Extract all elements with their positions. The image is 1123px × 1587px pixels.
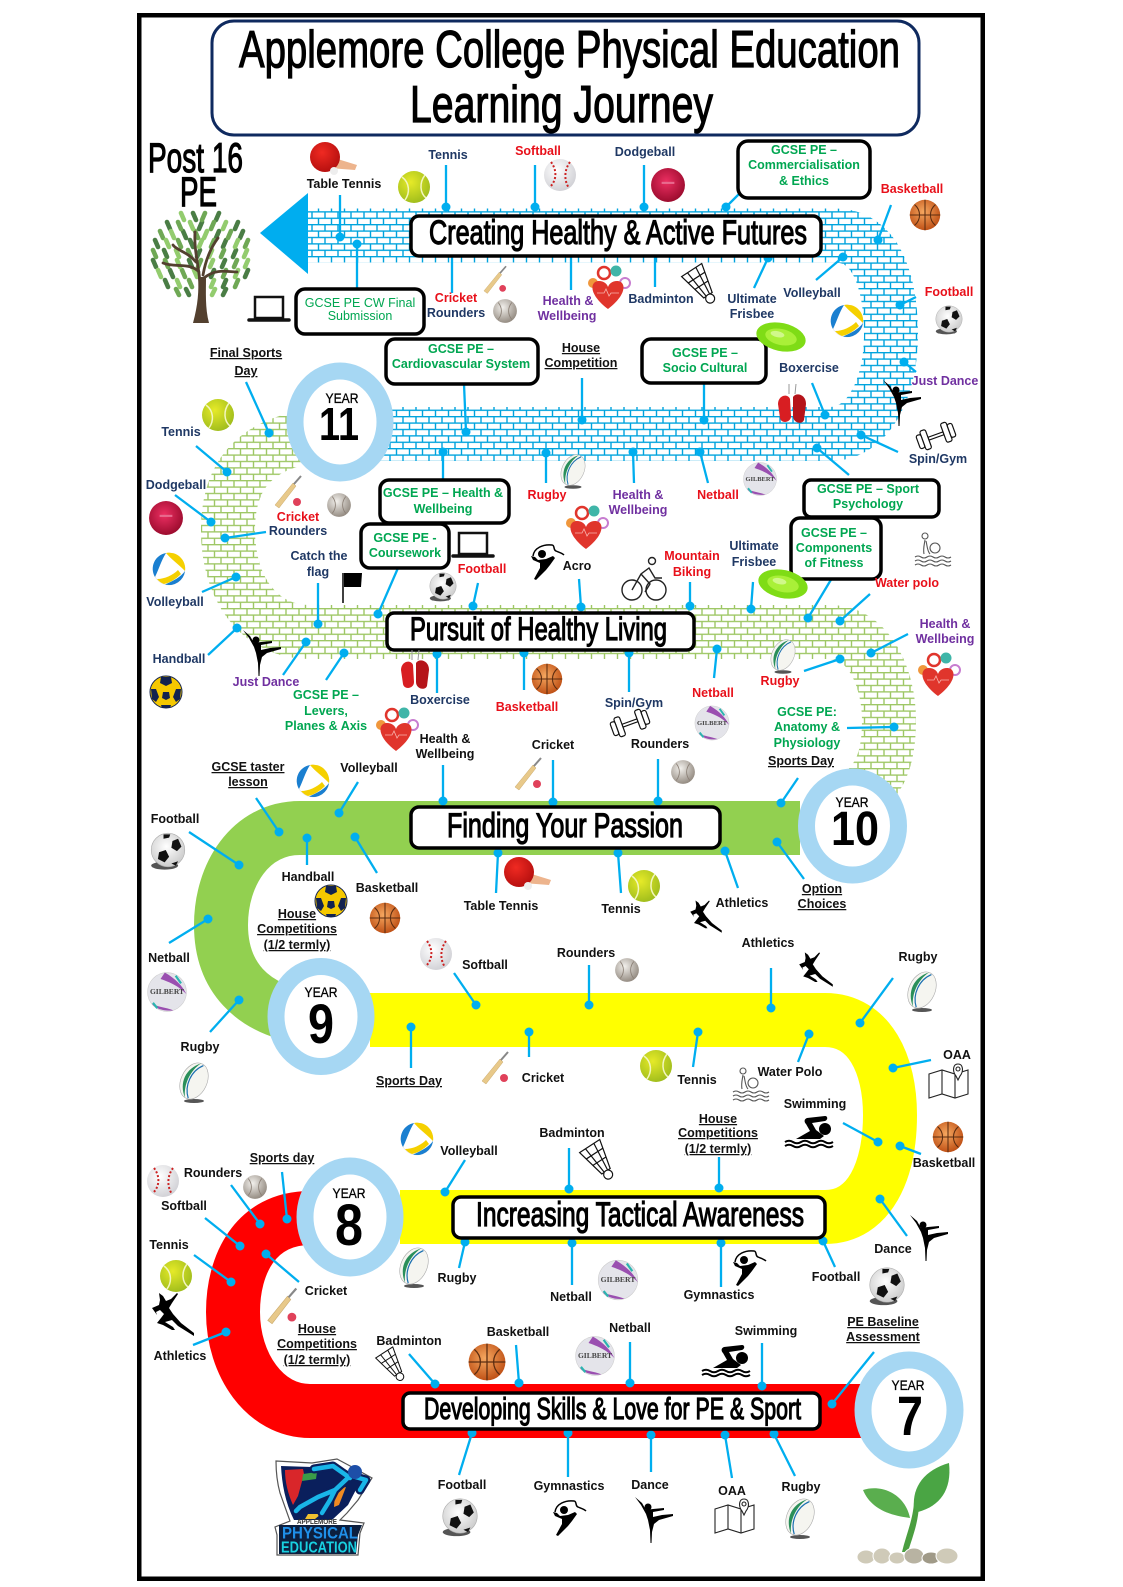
section: Developing Skills & Love for PE & Sport [147,1151,921,1543]
callout: Components of Fitness [791,518,881,579]
label: Ultimate Frisbee: Frisbee [732,555,776,569]
label: Health & Wellbeing: Health & [420,732,470,746]
label: Basketball: Basketball [913,1156,975,1170]
label: Option Choices: Option [802,882,842,896]
icon: rugby ball [174,1058,214,1104]
callout: Cardiovascular System: Cardiovascular System [392,357,530,371]
section: Finding Your Passion [148,732,846,1104]
label: Just Dance: Just Dance [233,675,299,689]
label: GCSE PE Levers, Planes & Axis: Planes & Axis [285,719,367,733]
label: Badminton: Badminton [539,1126,605,1140]
icon: rounders ball [493,299,517,323]
label: Netball: Netball [550,1290,592,1304]
badge: Year 10: 10 [831,803,879,856]
callout: Commercialisation & Ethics [738,141,870,198]
label: Rugby: Rugby [782,1480,820,1494]
label: Rounders: Rounders [631,737,689,751]
icon: map [715,1499,754,1533]
label: PE Baseline Assessment: Assessment [846,1330,921,1344]
label: GCSE PE Anatomy & Physiology [774,705,840,750]
callout: Components of Fitness: GCSE PE – [801,526,867,540]
callout: Sport Psychology: GCSE PE – Sport [817,482,920,496]
label: Rounders: Rounders [184,1166,242,1180]
label: Health & Wellbeing [538,294,596,323]
label: Basketball: Basketball [496,700,558,714]
label: Volleyball: Volleyball [340,761,398,775]
label: Volleyball: Volleyball [440,1144,498,1158]
badge: Year 10 [806,777,898,875]
label: Just Dance: Just Dance [912,374,978,388]
heading: Increasing Tactical Awareness [453,1196,825,1238]
icon: health [588,266,630,309]
label: Catch the flag: Catch the [291,549,348,563]
icon: football [443,1499,477,1536]
label: PE Baseline Assessment [846,1315,921,1344]
road: Year 11 blue brick [308,236,891,434]
label: Final Sports Day [210,346,282,378]
section: Increasing Tactical Awareness [376,936,975,1305]
logo: Applemore Physical Education: PHYSICAL [282,1524,358,1542]
label: Dance: Dance [874,1242,912,1256]
badge: Year 7: 7 [897,1384,923,1447]
icon: table tennis bat [310,142,357,175]
label: Ultimate Frisbee [727,292,777,321]
icon: water polo [915,533,951,566]
label: Dance: Dance [631,1478,669,1492]
label: Cricket: Cricket [435,291,478,305]
label: Netball: Netball [692,686,734,700]
icon: basketball [469,1344,505,1380]
label: Rounders: Rounders [269,524,327,538]
icon: dodgeball [149,501,183,535]
callout: Components of Fitness: Components [796,541,872,555]
label: Athletics: Athletics [716,896,768,910]
label: Gymnastics: Gymnastics [534,1479,604,1493]
connectors: red road [193,1172,874,1478]
callout: Sport Psychology: Psychology [833,497,903,511]
label: Mountain Biking [664,549,720,579]
heading: Post 16 PE: Post 16 [148,134,243,181]
label: Health & Wellbeing: Health & [920,617,970,631]
label: Rugby: Rugby [528,488,566,502]
label: Basketball: Basketball [487,1325,549,1339]
icon: tennis ball [640,1050,672,1082]
road: Year 7 red [233,1218,880,1411]
label: Water polo: Water polo [875,576,939,590]
icon: basketball [370,903,400,933]
icon: cricket [515,758,541,790]
badge: Year 7: YEAR [892,1377,924,1393]
icon: boxing gloves [401,650,429,689]
icon: cricket [268,1288,296,1324]
label: Option Choices [798,882,846,911]
label: Sports Day: Sports Day [768,754,834,768]
icon: laptop [453,533,493,556]
label: Sports Day: Sports Day [376,1074,442,1088]
label: Handball: Handball [282,870,334,884]
icon: flag [343,573,362,603]
icon: netball [743,462,777,496]
label: Dodgeball: Dodgeball [146,478,206,492]
title: Applemore College Physical Education [239,21,900,79]
icon: dancer [243,630,281,676]
label: House Competition [545,341,617,370]
label: Handball: Handball [153,652,205,666]
icon: rugby ball [556,451,590,489]
icon: basketball [910,200,940,230]
icon: boxing gloves [778,384,806,423]
badge: Year 9: 9 [308,992,334,1055]
label: Tennis: Tennis [677,1073,717,1087]
icon: rounders ball [615,958,639,982]
icon: cricket [484,266,506,293]
label: Football: Football [812,1270,860,1284]
label: House Competitions (1/2 termly) [678,1112,758,1156]
label: House Competitions (1/2 termly) [277,1322,357,1367]
icon: shuttlecock [580,1140,621,1185]
heading: Creating Healthy & Active Futures: Creating Healthy & Active Futures [429,214,807,252]
icon: rugby ball [394,1243,434,1289]
icon: health [376,708,418,751]
badge: Year 11 [295,371,385,473]
label: Spin/Gym: Spin/Gym [605,696,663,710]
icon: tennis ball [628,870,660,902]
arrow: to Post 16 [260,193,308,274]
icon: rugby ball [766,636,800,674]
label: Football: Football [438,1478,486,1492]
label: Football: Football [925,285,973,299]
icon: tennis ball [202,399,234,431]
icon: volleyball [831,305,863,337]
label: OAA: OAA [718,1484,746,1498]
callout: Components of Fitness: of Fitness [804,556,864,570]
label: Sports day: Sports day [250,1151,314,1165]
label: Ultimate Frisbee: Frisbee [730,307,774,321]
connectors: blue road [246,165,916,483]
icon: athlete [799,952,833,987]
icon: netball [148,973,186,1011]
icon: shuttlecock [376,1347,411,1385]
icon: softball [420,938,452,970]
icon: rugby ball [780,1494,820,1540]
icon: tennis ball [160,1260,192,1292]
page frame [139,15,983,1579]
icon: handball [150,676,182,708]
label: Rugby: Rugby [899,950,937,964]
icon: seedling [857,1463,958,1564]
icon: gymnast [733,1251,766,1286]
label: GCSE PE Anatomy & Physiology: Physiology [774,736,840,750]
label: Health & Wellbeing: Wellbeing [609,503,667,517]
label: GCSE PE Anatomy & Physiology: Anatomy & [774,720,840,734]
label: Water Polo: Water Polo [758,1065,823,1079]
label: Swimming: Swimming [784,1097,846,1111]
badge: Year 9 [276,966,366,1066]
label: Volleyball: Volleyball [146,595,204,609]
label: Badminton: Badminton [376,1334,442,1348]
badge: Year 11: 11 [319,398,359,450]
label: Health & Wellbeing [416,732,474,761]
icon: rounders ball [671,760,695,784]
icon: health [566,506,608,549]
icon: frisbee [756,565,810,603]
icon: athlete [152,1293,194,1336]
icon: swimmer [702,1345,750,1376]
label: Health & Wellbeing: Health & [543,294,593,308]
heading: Developing Skills & Love for PE & Sport: Developing Skills & Love for PE & Sport [424,1391,801,1426]
label: Rugby: Rugby [761,674,799,688]
icon: athlete [690,900,722,933]
icon: football [936,306,962,334]
icon: football [870,1268,904,1305]
label: Gymnastics: Gymnastics [684,1288,754,1302]
title box [212,21,919,135]
heading: Developing Skills & Love for PE & Sport [403,1391,820,1429]
icon: netball [695,706,729,740]
icon: dodgeball [651,168,685,202]
connectors: yellow road [411,965,931,1287]
label: Health & Wellbeing: Wellbeing [538,309,596,323]
icon: rounders ball [243,1175,267,1199]
label: Spin/Gym: Spin/Gym [909,452,967,466]
logo: Applemore Physical Education [275,1459,372,1556]
label: Volleyball: Volleyball [783,286,841,300]
label: PE Baseline Assessment: PE Baseline [847,1315,919,1329]
logo: Applemore Physical Education: APPLEMORE [297,1517,337,1526]
heading: Post 16 PE [148,134,243,215]
icon: basketball [532,664,562,694]
icon: volleyball [401,1123,433,1155]
badge: Year 9: YEAR [304,984,338,1000]
label: House Competitions (1/2 termly): (1/2 termly) [284,1353,350,1367]
label: Ultimate Frisbee [729,539,779,569]
icon: netball [598,1260,638,1300]
label: Athletics: Athletics [742,936,794,950]
icon: swimmer [785,1116,833,1147]
heading: Pursuit of Healthy Living: Pursuit of Healthy Living [410,611,667,647]
label: Health & Wellbeing [916,617,974,646]
title [239,21,900,134]
icon: cricket [482,1052,508,1084]
icon: volleyball [297,765,329,797]
label: House Competitions (1/2 termly): House [298,1322,336,1336]
icon: dancer [883,380,921,426]
label: GCSE PE Levers, Planes & Axis [285,688,367,733]
label: GCSE PE Levers, Planes & Axis: GCSE PE – [293,688,359,702]
label: Softball: Softball [462,958,508,972]
label: House Competitions (1/2 termly): (1/2 termly) [264,938,330,952]
label: House Competitions (1/2 termly): Competitions [678,1126,758,1140]
label: Final Sports Day: Final Sports [210,346,282,360]
label: Rugby: Rugby [181,1040,219,1054]
label: GCSE taster lesson: lesson [228,775,268,789]
road: Year 10 green brick [228,434,889,800]
callout: Health & Wellbeing: Wellbeing [414,502,472,516]
callout: CW Final Submission: GCSE PE CW Final [305,296,415,310]
callout: Socio Cultural: GCSE PE – [672,346,738,360]
title: Learning Journey [410,76,713,134]
icon: laptop [249,297,289,320]
label: Catch the flag: flag [307,565,329,579]
label: Ultimate Frisbee: Ultimate [727,292,777,306]
icon: netball [576,1337,614,1375]
callout: Coursework [361,524,449,568]
road: Year 8 yellow [370,1020,890,1217]
icon: softball [544,159,576,191]
label: House Competitions (1/2 termly): House [278,907,316,921]
label: Football: Football [458,562,506,576]
label: Mountain Biking: Mountain [664,549,720,563]
connectors: green brick road [175,446,908,728]
label: Cricket: Cricket [522,1071,565,1085]
label: Basketball: Basketball [881,182,943,196]
callout: Coursework: Coursework [369,546,441,560]
label: Tennis: Tennis [149,1238,189,1252]
badge: Year 10: YEAR [836,794,868,810]
label: Table Tennis: Table Tennis [307,177,381,191]
icon: rugby ball [902,967,942,1013]
callout: Socio Cultural: Socio Cultural [663,361,747,375]
badge: Year 8 [305,1166,395,1268]
label: Football: Football [151,812,199,826]
label: Boxercise: Boxercise [779,361,839,375]
label: Cricket: Cricket [305,1284,348,1298]
callout: Health & Wellbeing: GCSE PE – Health & [383,486,503,500]
label: House Competitions (1/2 termly): (1/2 termly) [685,1142,751,1156]
label: Health & Wellbeing: Wellbeing [916,632,974,646]
label: Catch the flag [291,549,348,579]
icon: health [918,652,960,696]
label: House Competitions (1/2 termly) [257,907,337,952]
icon: frisbee [754,318,808,356]
label: GCSE taster lesson [212,760,285,789]
icon: dancer [910,1215,948,1261]
icon: gymnast [553,1501,586,1536]
icon: softball [147,1165,179,1197]
label: Tennis: Tennis [428,148,468,162]
callout: Coursework: GCSE PE - [373,531,437,545]
icon: table tennis bat [504,857,551,890]
icon: handball [315,885,347,917]
icon: basketball [933,1122,963,1152]
label: Option Choices: Choices [798,897,846,911]
icon: shuttlecock [682,264,723,309]
icon: map [929,1064,968,1098]
label: Badminton: Badminton [628,292,694,306]
label: Swimming: Swimming [735,1324,797,1338]
icon: dumbbell [915,420,957,452]
label: Rugby: Rugby [438,1271,476,1285]
label: Netball: Netball [697,488,739,502]
label: Health & Wellbeing [609,488,667,517]
icon: gymnast [531,545,564,580]
badge: Year 7 [863,1360,955,1460]
icon: dancer [635,1497,673,1543]
callout: Commercialisation & Ethics: Commercialisation [748,158,860,172]
label: Health & Wellbeing: Wellbeing [416,747,474,761]
badge: Year 8: YEAR [332,1185,366,1201]
connectors: green road [169,759,804,1032]
label: Tennis: Tennis [161,425,201,439]
label: Softball: Softball [515,144,561,158]
label: Softball: Softball [161,1199,207,1213]
label: Boxercise: Boxercise [410,693,470,707]
badge: Year 11: YEAR [326,390,358,406]
callout: Commercialisation & Ethics: GCSE PE – [771,143,837,157]
heading: Post 16 PE: PE [180,168,217,215]
label: Dodgeball: Dodgeball [615,145,675,159]
callout: Sport Psychology [804,480,939,517]
heading: Finding Your Passion: Finding Your Passion [447,807,683,845]
badge: Year 8: 8 [335,1193,363,1258]
label: Health & Wellbeing: Health & [613,488,663,502]
icon: tennis ball [398,171,430,203]
label: OAA: OAA [943,1048,971,1062]
callout: CW Final Submission [296,289,424,334]
label: Basketball: Basketball [356,881,418,895]
icon: cyclist [622,558,666,600]
heading: Increasing Tactical Awareness: Increasing Tactical Awareness [476,1196,804,1234]
callout: CW Final Submission: Submission [328,309,392,323]
icon: football [430,573,456,601]
label: Acro: Acro [563,559,592,573]
icon: dumbbell [609,707,651,739]
label: Mountain Biking: Biking [673,565,711,579]
callout: Health & Wellbeing [380,480,509,523]
label: Cricket: Cricket [532,738,575,752]
label: GCSE PE Anatomy & Physiology: GCSE PE: [777,705,837,719]
label: Final Sports Day: Day [235,364,258,378]
section: Pursuit of Healthy Living [146,399,974,751]
label: Athletics: Athletics [154,1349,206,1363]
logo: Applemore Physical Education: EDUCATION [281,1540,357,1556]
label: Cricket: Cricket [277,510,320,524]
label: GCSE taster lesson: GCSE taster [212,760,285,774]
icon: volleyball [153,553,185,585]
label: Netball: Netball [609,1321,651,1335]
label: House Competition: House [562,341,600,355]
label: Ultimate Frisbee: Ultimate [729,539,779,553]
icon: water polo [733,1068,769,1101]
callout: Commercialisation & Ethics: & Ethics [779,174,829,188]
label: Tennis: Tennis [601,902,641,916]
icon: rounders ball [327,493,351,517]
label: Rounders: Rounders [427,306,485,320]
label: Table Tennis: Table Tennis [464,899,538,913]
icon: football [151,833,185,870]
label: Netball: Netball [148,951,190,965]
label: House Competitions (1/2 termly): Competitions [257,922,337,936]
label: House Competition: Competition [545,356,617,370]
callout: Cardiovascular System: GCSE PE – [428,342,494,356]
icon: tree [153,213,248,323]
label: Rounders: Rounders [557,946,615,960]
road: Year 9 green [221,828,800,1018]
label: House Competitions (1/2 termly): House [699,1112,737,1126]
label: House Competitions (1/2 termly): Competitions [277,1337,357,1351]
callout: Socio Cultural [642,339,766,383]
callout: Cardiovascular System [386,339,538,384]
section: Creating Healthy & Active Futures [210,141,978,549]
label: GCSE PE Levers, Planes & Axis: Levers, [304,704,348,718]
icon: cricket [275,476,301,508]
heading: Creating Healthy & Active Futures [411,214,821,256]
